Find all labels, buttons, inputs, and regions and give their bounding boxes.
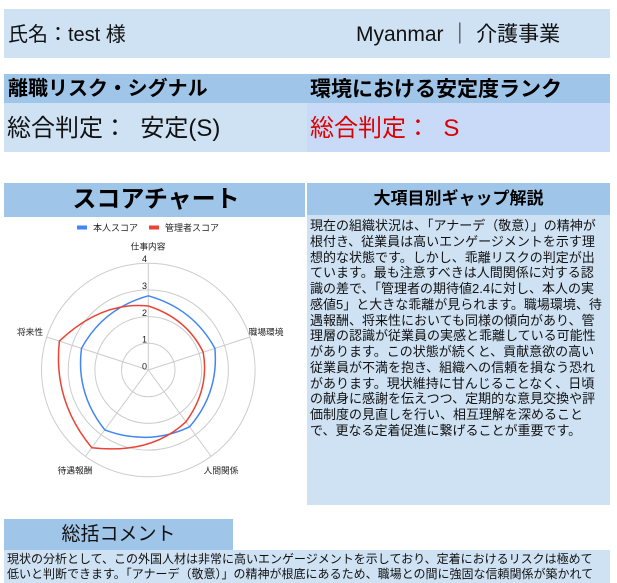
axis ticks: 4 bbox=[142, 254, 147, 264]
text: country and business: Myanmar ｜ 介護事業 bbox=[356, 23, 560, 46]
panel: gap explanation text: 従業員が不満を抱き、組織への信頼を損なう恐れ bbox=[310, 360, 595, 375]
panel: gap explanation text: があります。この状態が続くと、貢献意欲の高い bbox=[310, 344, 594, 359]
axis labels: 職場環境 bbox=[249, 326, 284, 337]
chart: radar score chart bbox=[17, 222, 284, 478]
heading: summary comment bbox=[4, 519, 233, 550]
heading: score chart: スコアチャート bbox=[72, 186, 240, 213]
panel: summary comment text: 低いと判断できます。「アナーデ（敬意）」の精神が根底にあるため、職場との間に強固な信頼関係が築かれて bbox=[7, 567, 593, 581]
panel: summary comment text bbox=[4, 550, 610, 583]
panel: gap explanation text: 識の差で、「管理者の期待値2.4に対し、本人の実 bbox=[310, 281, 594, 296]
heading: summary comment: 総括コメント bbox=[61, 524, 176, 545]
text: name: 氏名：test 様 bbox=[8, 24, 126, 46]
panel: gap explanation text: 価制度の見直しを行い、相互理解を深めること bbox=[310, 407, 583, 422]
panel: gap explanation text: 現在の組織状況は、「アナーデ（敬意）」の精神が bbox=[310, 218, 596, 233]
legend: score series: 管理者スコア bbox=[165, 222, 219, 233]
axis labels: 将来性 bbox=[17, 326, 43, 337]
panel: gap explanation text: の献身に感謝を伝えつつ、定期的な意見交換や評 bbox=[310, 391, 595, 406]
panel: gap explanation text: 感値5」と大きな乖離が見られます。職場環境、待 bbox=[310, 297, 602, 312]
axis ticks bbox=[142, 254, 147, 372]
panel: gap explanation text: があります。現状維持に甘んじることなく、日頃 bbox=[310, 376, 594, 391]
panel: gap explanation text: 想的な状態です。しかし、乖離リスクの判定が出 bbox=[310, 250, 595, 265]
heading: environment stability rank bbox=[307, 74, 610, 103]
panel: gap explanation text: で、更なる定着促進に繋げることが重要です。 bbox=[310, 423, 581, 438]
panel: gap explanation text: 遇報酬、将来性においても同様の傾向があり、管 bbox=[310, 313, 594, 328]
heading: environment stability rank: 環境における安定度ランク bbox=[310, 78, 562, 101]
panel: environment stability rank bbox=[307, 74, 610, 152]
axis labels: 仕事内容 bbox=[131, 240, 166, 252]
panel: gap explanation text: 理層の認識が従業員の実感と乖離している可能性 bbox=[310, 328, 596, 343]
text: overall verdict S: 総合判定： S bbox=[310, 115, 459, 142]
axis ticks: 3 bbox=[142, 281, 147, 291]
axis ticks: 1 bbox=[142, 334, 147, 344]
series: self score bbox=[81, 296, 215, 437]
panel: summary comment text: 現状の分析として、この外国人材は非常に高いエンゲージメントを示しており、定着におけるリスクは極めて bbox=[7, 552, 593, 566]
text: overall verdict stable: 総合判定： 安定(S) bbox=[7, 115, 220, 142]
heading: turnover risk signal bbox=[4, 74, 307, 103]
axis labels: 人間関係 bbox=[204, 464, 239, 476]
panel: gap explanation text: 根付き、従業員は高いエンゲージメントを示す理 bbox=[310, 234, 595, 249]
axis labels: 待遇報酬 bbox=[58, 464, 92, 476]
axis ticks: 0 bbox=[142, 362, 147, 372]
heading: score chart bbox=[4, 183, 305, 217]
heading: gap explanation by category bbox=[307, 183, 610, 215]
panel: turnover risk signal bbox=[4, 74, 307, 152]
series: manager score bbox=[58, 305, 205, 449]
axis ticks: 2 bbox=[142, 308, 147, 318]
panel: name and profile header bbox=[4, 9, 610, 58]
axis labels bbox=[17, 240, 284, 476]
heading: turnover risk signal: 離職リスク・シグナル bbox=[8, 78, 208, 100]
legend: score series bbox=[77, 222, 219, 233]
legend: score series: 本人スコア bbox=[93, 222, 138, 233]
heading: gap explanation by category: 大項目別ギャップ解説 bbox=[374, 189, 544, 208]
panel: gap explanation text: ています。最も注意すべきは人間関係に対する認 bbox=[310, 265, 594, 280]
panel: gap explanation text bbox=[307, 215, 610, 505]
